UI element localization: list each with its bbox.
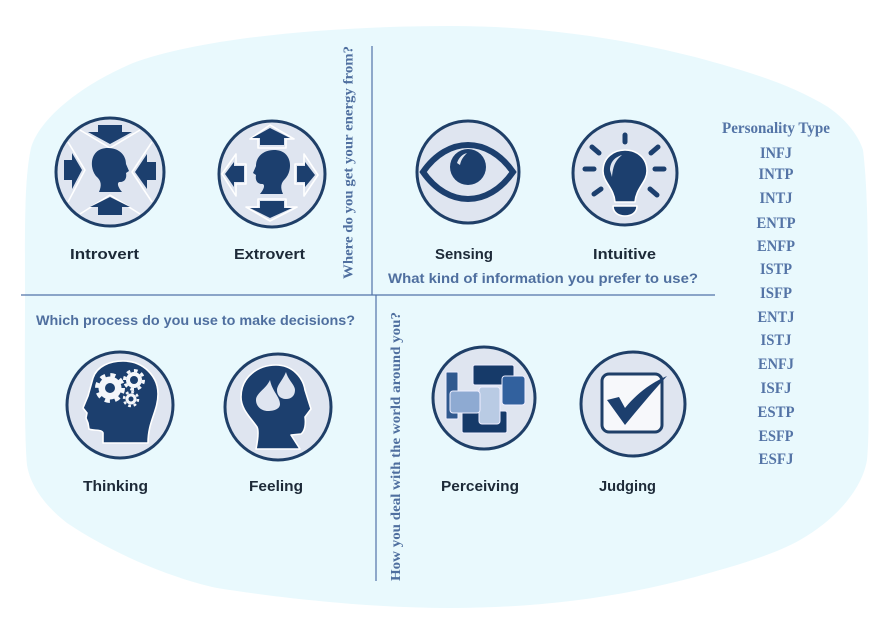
personality type list: INTJ [760, 190, 792, 207]
personality type list: ESFP [758, 428, 794, 445]
label: Introvert: Introvert [70, 246, 139, 263]
personality type list: INFJ [760, 145, 792, 162]
label: Feeling: Feeling [249, 478, 303, 495]
personality type list: ENFP [757, 238, 795, 255]
label: Extrovert: Extrovert [234, 246, 305, 263]
personality type list: ISTP [760, 261, 792, 278]
icon: feeling head [225, 354, 331, 460]
icon: thinking head [67, 352, 173, 458]
icon: intuitive bulb [573, 121, 677, 225]
personality type list [722, 120, 830, 468]
icon: introvert [56, 118, 164, 226]
personality type list: INTP [758, 166, 794, 183]
question: information: What kind of information you prefer to use? [388, 270, 698, 286]
label: Intuitive: Intuitive [593, 246, 656, 263]
quadrant divider lines [21, 46, 715, 581]
label: Thinking: Thinking [83, 478, 148, 495]
icon: sensing eye [417, 121, 519, 223]
label: Sensing: Sensing [435, 246, 493, 263]
personality type list: ENFJ [758, 356, 794, 373]
list heading: Personality Type [722, 120, 830, 137]
personality type list: ENTP [756, 215, 796, 232]
personality type list: ISFP [760, 285, 792, 302]
icon: judging checkbox [581, 352, 685, 456]
question: decisions: Which process do you use to make decisions? [36, 312, 355, 328]
question: energy: Where do you get your energy from? [342, 46, 356, 279]
label: Perceiving: Perceiving [441, 478, 519, 495]
icon: perceiving overlapping windows [433, 347, 535, 449]
label: Judging: Judging [599, 478, 656, 495]
personality type list: ESFJ [758, 451, 794, 468]
personality type list: ISTJ [760, 332, 792, 349]
personality type list: ESTP [758, 404, 795, 421]
question: world: How you deal with the world around you? [389, 312, 404, 581]
icon: extrovert [219, 121, 325, 227]
personality type list: ENTJ [758, 309, 794, 326]
personality type list: ISFJ [760, 380, 792, 397]
